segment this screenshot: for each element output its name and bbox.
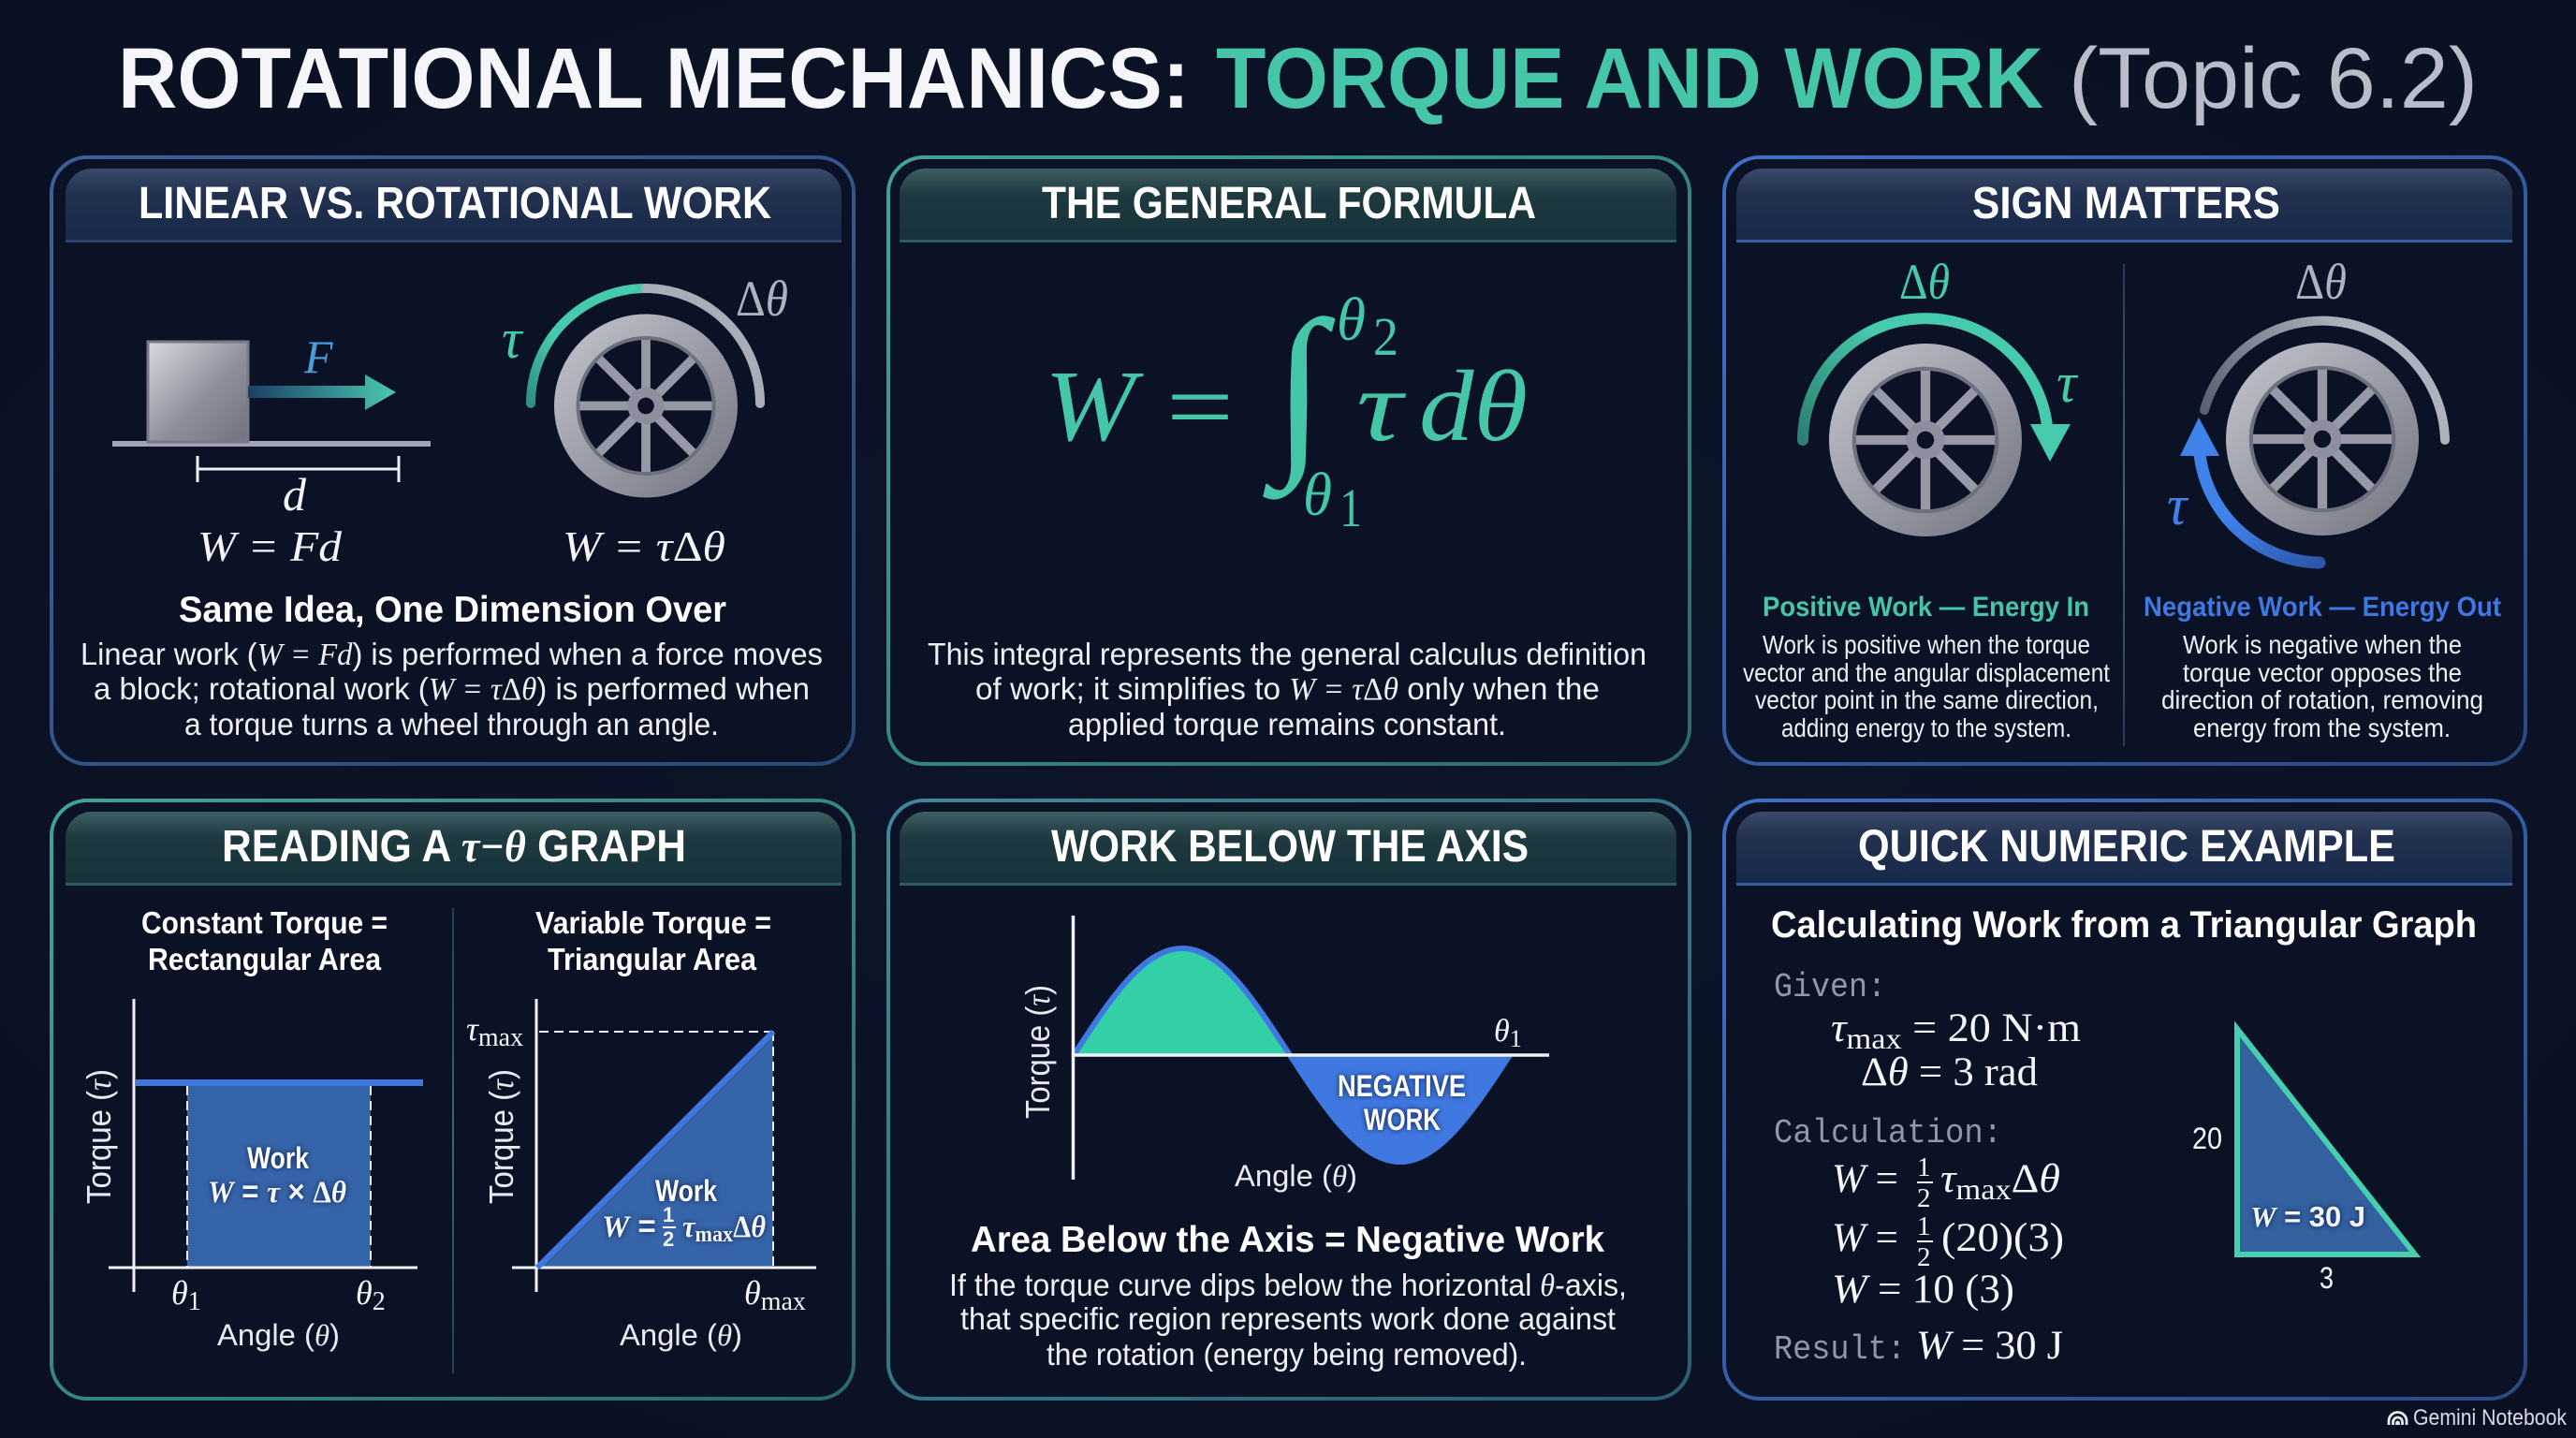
calculation steps: 2 <box>1917 1183 1930 1213</box>
chart: constant torque rectangle <box>80 999 423 1352</box>
calculation steps: θ <box>2039 1157 2060 1201</box>
calculation steps: W = 10 (3) <box>1832 1268 2014 1312</box>
heading: quick numeric example: QUICK NUMERIC EXAMPLE <box>1858 822 2395 872</box>
title: TORQUE AND WORK <box>1216 31 2043 126</box>
given values: Δθ = 3 rad <box>1861 1050 2038 1094</box>
diagram: positive work wheel <box>1803 254 2079 536</box>
formula: W = Fd: W = Fd <box>198 522 343 570</box>
heading: the general formula: THE GENERAL FORMULA <box>1042 179 1536 228</box>
subheading: constant torque: Rectangular Area <box>148 943 381 977</box>
panel: linear vs rotational work <box>51 157 854 764</box>
given values: τ <box>1831 1006 1848 1050</box>
diagram: triangular area: W = 30 J <box>2250 1200 2365 1233</box>
chart: variable torque triangle: Work <box>655 1174 717 1208</box>
formula: work integral: τ <box>1356 351 1406 462</box>
heading: the general formula <box>900 169 1676 242</box>
subheading: constant torque <box>141 906 388 977</box>
text block: negative work: energy from the system. <box>2193 713 2451 742</box>
calculation steps: 1 <box>1917 1211 1930 1241</box>
heading: work below the axis: WORK BELOW THE AXIS <box>1051 822 1529 872</box>
chart: constant torque rectangle: θ <box>356 1274 373 1312</box>
text block: positive work: vector point in the same direction, <box>1755 685 2099 714</box>
body text: integral explanation: applied torque remains constant. <box>1068 708 1506 742</box>
formula: work integral: 1 <box>1339 477 1362 538</box>
diagram: negative work wheel: Δθ <box>2295 254 2347 310</box>
text block: negative work: torque vector opposes the <box>2183 658 2462 687</box>
chart: constant torque rectangle: Work <box>247 1141 309 1175</box>
calculation steps: τ <box>1940 1157 1957 1201</box>
body text: linear vs rotational: a block; rotational work (W = τΔθ) is performed when <box>94 672 810 707</box>
chart: torque curve above and below axis: NEGATIVE <box>1338 1069 1466 1103</box>
formula: work integral: dθ <box>1419 351 1528 462</box>
heading: quick numeric example <box>1736 812 2512 886</box>
diagram: triangular area: 3 <box>2320 1261 2334 1295</box>
formula: W = tau delta theta: W = τΔθ <box>563 522 725 570</box>
subheading: area below the axis: Area Below the Axis = Negative Work <box>971 1220 1604 1260</box>
text block: positive work: adding energy to the system. <box>1781 713 2071 742</box>
chart: constant torque rectangle: Angle (θ) <box>217 1318 340 1352</box>
subheading: variable torque: Variable Torque = <box>535 906 771 941</box>
diagram: negative work wheel: τ <box>2167 475 2189 536</box>
calculation steps: max <box>1956 1172 2012 1206</box>
diagram: wheel with torque arc: τ <box>502 308 524 370</box>
chart: variable torque triangle: Δ <box>733 1211 751 1244</box>
calculation steps: 2 <box>1917 1242 1930 1272</box>
diagram: wheel with torque arc <box>502 271 788 498</box>
formula: work integral <box>1045 284 1528 538</box>
text block: positive work: Work is positive when the torque <box>1763 630 2090 659</box>
chart: constant torque rectangle: θ <box>171 1274 188 1312</box>
subheading: calculating work: Calculating Work from a Triangular Graph <box>1771 904 2477 946</box>
heading: linear vs rotational work <box>66 169 842 242</box>
calculation steps: W = <box>1832 1157 1898 1201</box>
text block: positive work: vector and the angular displacement <box>1743 658 2110 687</box>
calculation steps: (20)(3) <box>1941 1216 2064 1260</box>
formula: work integral: ∫ <box>1263 284 1335 500</box>
chart: variable torque triangle: max <box>761 1287 806 1316</box>
calculation steps: Calculation: <box>1774 1114 2002 1152</box>
body text: integral explanation: of work; it simplifies to W = τΔθ only when the <box>975 672 1600 707</box>
chart: constant torque rectangle: 1 <box>188 1287 201 1316</box>
calculation steps: W = <box>1832 1216 1898 1260</box>
panel: the general formula <box>888 157 1690 764</box>
chart: variable torque triangle: θ <box>751 1211 767 1244</box>
chart: torque curve above and below axis <box>1018 916 1549 1193</box>
body text: below the axis: that specific region represents work done against <box>960 1302 1617 1337</box>
body text: linear vs rotational: a torque turns a wheel through an angle. <box>184 708 719 742</box>
diagram: wheel with torque arc: Δθ <box>736 271 788 327</box>
chart: variable torque triangle <box>466 999 816 1352</box>
formula: work integral: θ <box>1337 286 1366 354</box>
heading: work below the axis <box>900 812 1676 886</box>
given values <box>1774 968 2081 1094</box>
text block: negative work: Work is negative when the <box>2183 630 2462 659</box>
chart: constant torque rectangle: W = τ × Δθ <box>208 1174 346 1210</box>
text block: negative work <box>2144 592 2501 742</box>
chart: torque curve above and below axis: WORK <box>1364 1103 1441 1137</box>
text block: positive work: Positive Work — Energy In <box>1763 592 2089 623</box>
result: Result: <box>1774 1330 1906 1369</box>
body text: below the axis: the rotation (energy being removed). <box>1046 1338 1527 1372</box>
diagram: block pushed by force <box>112 330 431 521</box>
heading: reading a graph <box>66 812 842 886</box>
chart: variable torque triangle: θ <box>744 1274 761 1312</box>
chart: constant torque rectangle: 2 <box>373 1287 386 1316</box>
result <box>1774 1324 2063 1369</box>
chart: variable torque triangle: max <box>695 1223 733 1247</box>
subheading: variable torque <box>535 906 771 977</box>
diagram: block pushed by force: F <box>303 330 333 383</box>
body text: integral explanation <box>928 638 1647 742</box>
subheading: variable torque: Triangular Area <box>548 943 756 977</box>
calculation steps: Δ <box>2012 1157 2039 1201</box>
heading: sign matters <box>1736 169 2512 242</box>
diagram: triangular area <box>2192 1029 2415 1295</box>
panel: reading a torque-angle graph <box>51 800 854 1399</box>
calculation steps <box>1774 1114 2064 1312</box>
title: (Topic 6.2) <box>2069 31 2478 126</box>
text block: negative work: direction of rotation, removing <box>2161 685 2483 714</box>
calculation steps: 1 <box>1917 1152 1930 1182</box>
given values: max <box>1847 1021 1902 1055</box>
chart: variable torque triangle: τ <box>682 1211 696 1244</box>
diagram: positive work wheel: Δθ <box>1899 254 1950 310</box>
result: W = 30 J <box>1916 1324 2063 1368</box>
panel: work below the axis <box>888 800 1690 1399</box>
chart: variable torque triangle: Torque (τ) <box>482 1069 520 1204</box>
body text: below the axis <box>949 1269 1627 1372</box>
text block: positive work <box>1743 592 2110 742</box>
chart: variable torque triangle: max <box>478 1023 523 1052</box>
body text: integral explanation: This integral represents the general calculus definition <box>928 638 1647 672</box>
body text: linear vs rotational <box>80 638 823 742</box>
formula: work integral: θ <box>1303 461 1332 529</box>
chart: variable torque triangle: 1 <box>663 1203 674 1226</box>
chart: torque curve above and below axis: Angle (θ) <box>1235 1159 1357 1193</box>
diagram: triangular area: 20 <box>2192 1122 2222 1155</box>
chart: variable torque triangle: W = <box>602 1209 656 1244</box>
title <box>118 31 2478 126</box>
heading: linear vs rotational work: LINEAR VS. ROTATIONAL WORK <box>139 179 771 228</box>
body text: linear vs rotational: Linear work (W = Fd) is performed when a force moves <box>80 638 823 672</box>
diagram: positive work wheel: τ <box>2056 352 2079 414</box>
title: ROTATIONAL MECHANICS: <box>118 31 1190 126</box>
chart: variable torque triangle: Angle (θ) <box>620 1318 742 1352</box>
chart: variable torque triangle: 2 <box>663 1227 674 1251</box>
chart: torque curve above and below axis: 1 <box>1510 1025 1522 1052</box>
diagram: block pushed by force: d <box>283 468 307 521</box>
text block: negative work: Negative Work — Energy Out <box>2144 592 2501 623</box>
subheading: constant torque: Constant Torque = <box>141 906 388 941</box>
formula: work integral: = <box>1166 352 1234 462</box>
chart: variable torque triangle: τ <box>466 1010 478 1048</box>
diagram: negative work wheel <box>2167 254 2445 563</box>
heading: sign matters: SIGN MATTERS <box>1972 179 2280 228</box>
panel: sign matters <box>1724 157 2525 764</box>
panel: quick numeric example <box>1724 800 2525 1399</box>
chart: torque curve above and below axis: Torque (τ) <box>1018 985 1057 1119</box>
formula: work integral: 2 <box>1373 306 1398 367</box>
chart: torque curve above and below axis: θ <box>1494 1014 1510 1049</box>
chart: constant torque rectangle: Torque (τ) <box>80 1069 118 1204</box>
given values: Given: <box>1774 968 1886 1006</box>
subheading: same idea: Same Idea, One Dimension Over <box>179 590 726 630</box>
formula: work integral: W <box>1045 351 1145 462</box>
given values: = 20 N·m <box>1902 1006 2081 1050</box>
body text: below the axis: If the torque curve dips below the horizontal θ-axis, <box>949 1269 1627 1303</box>
heading: reading a graph: READING A τ−θ GRAPH <box>222 822 686 872</box>
